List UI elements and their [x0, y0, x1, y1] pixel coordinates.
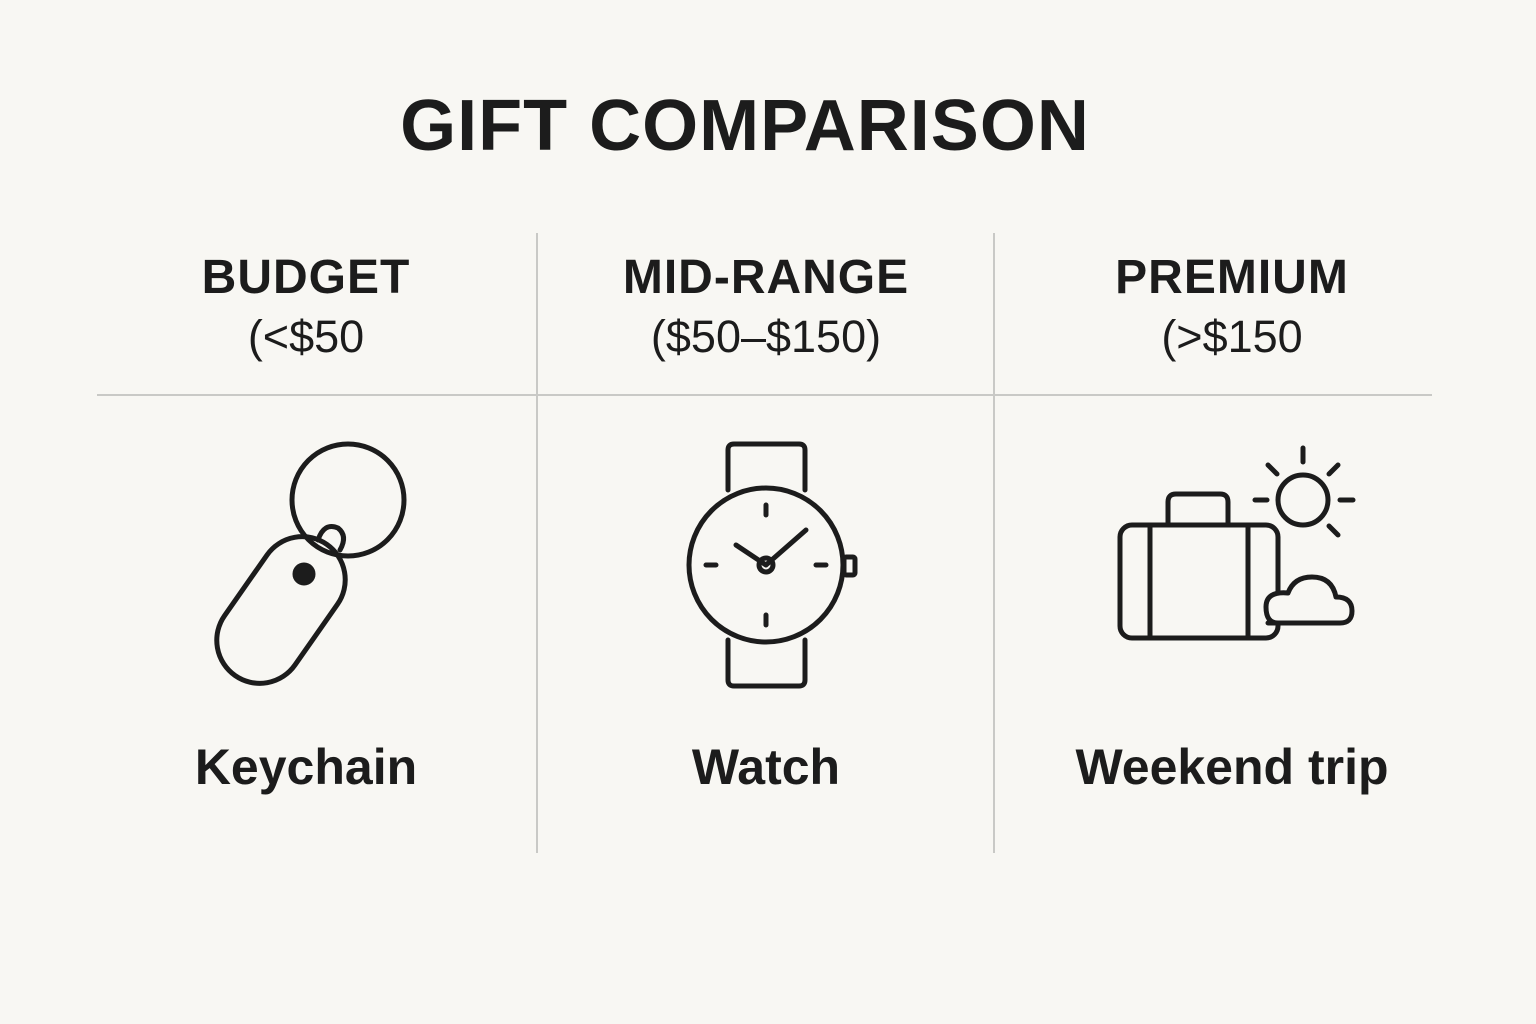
heading: budget: BUDGET	[202, 251, 410, 304]
label: keychain: Keychain	[195, 739, 417, 795]
icon: suitcase with sun and cloud	[1120, 448, 1353, 638]
label: watch: Watch	[692, 739, 840, 795]
price: mid-range: ($50–$150)	[651, 311, 881, 362]
heading: premium: PREMIUM	[1115, 251, 1349, 304]
heading: mid-range: MID-RANGE	[623, 251, 909, 304]
title: GIFT COMPARISON	[400, 86, 1090, 166]
icon: watch	[689, 444, 855, 686]
price: budget: (<$50	[248, 311, 364, 362]
price: premium: (>$150	[1161, 311, 1303, 362]
label: weekend trip: Weekend trip	[1075, 739, 1389, 795]
icon: keychain	[200, 444, 404, 700]
